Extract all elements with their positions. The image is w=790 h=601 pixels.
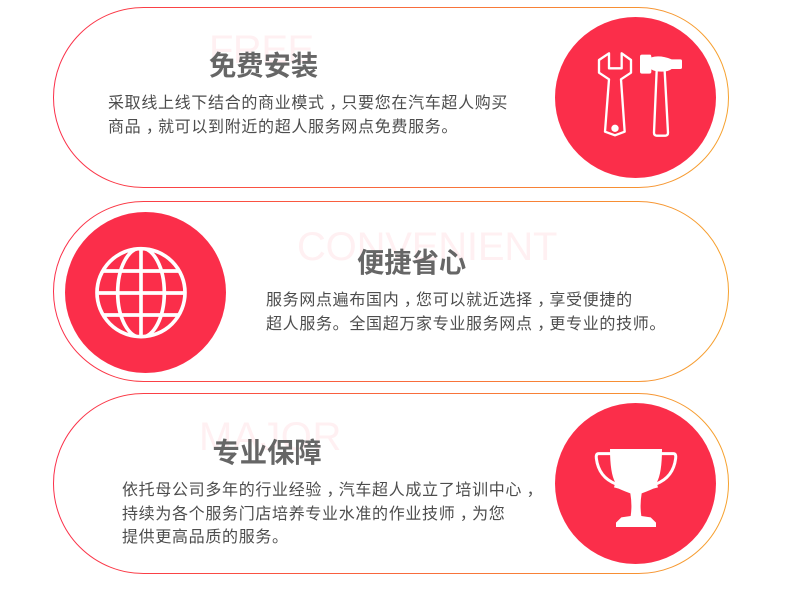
- text block: free installation: 商品 ，就可以到附近的超人服务网点免费服务。: [108, 119, 458, 136]
- text block: professional: [122, 481, 543, 546]
- ghost word: MAJOR: MAJOR: [199, 415, 342, 459]
- text block: convenient: 超人服务。全国超万家专业服务网点 ，更专业的技师。: [266, 316, 666, 333]
- heading: 便捷省心: 便捷省心: [357, 247, 466, 278]
- ghost word: CONVENIENT: CONVENIENT: [297, 225, 557, 269]
- icon: trophy: [596, 449, 676, 527]
- text block: professional: 提供更高品质的服务。: [122, 529, 289, 546]
- icon: wrench and hammer: [599, 53, 682, 136]
- text block: convenient: 服务网点遍布国内 ，您可以就近选择 ，享受便捷的: [266, 292, 633, 309]
- panel outline: professional: [54, 394, 728, 574]
- icon: globe: [97, 248, 185, 337]
- text block: professional: 依托母公司多年的行业经验 ，汽车超人成立了培训中心 ，: [122, 482, 543, 499]
- icon circle: globe: [65, 212, 226, 373]
- heading: 免费安装: 免费安装: [209, 50, 318, 81]
- panel outline: convenient: [54, 202, 728, 382]
- heading: 专业保障: 专业保障: [212, 437, 322, 468]
- text block: free installation: 采取线上线下结合的商业模式 ，只要您在汽车超人购买: [108, 95, 508, 112]
- text block: convenient: [266, 291, 666, 333]
- text block: professional: 持续为各个服务门店培养专业水准的作业技师 ，为您: [122, 506, 505, 522]
- icon circle: tools: [555, 17, 716, 178]
- icon circle: trophy: [555, 403, 716, 564]
- text block: free installation: [108, 94, 508, 136]
- ghost word: FREE: FREE: [209, 28, 314, 72]
- panel outline: free installation: [54, 8, 728, 188]
